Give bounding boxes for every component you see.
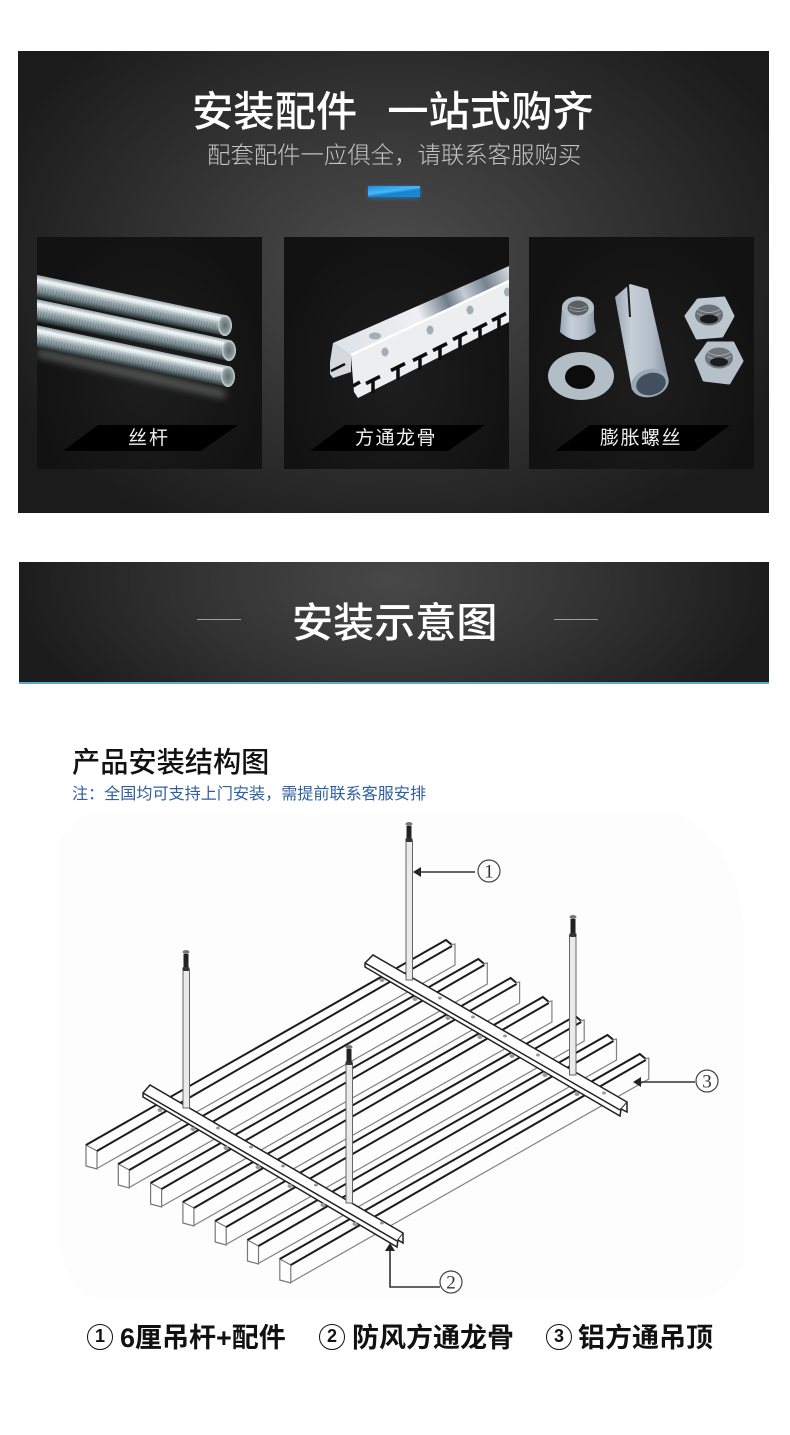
card: expansion bolt [529, 237, 754, 469]
image: slotted channel [310, 266, 509, 451]
caption: expansion bolt: 膨胀螺丝 [600, 428, 682, 449]
heading: diagram banner title: 安装示意图 [292, 600, 497, 646]
callout: marker 3 [633, 1070, 718, 1092]
chart: ceiling structure diagram [85, 822, 719, 1294]
crossbar: front keel [143, 1085, 403, 1247]
image: threaded rods [37, 274, 238, 451]
callout: marker 2: 2 [446, 1272, 456, 1294]
caption: threaded rod: 丝杆 [128, 428, 170, 449]
legend: part names [87, 1323, 713, 1353]
heading: accessories title: 安装配件 一站式购齐 [192, 89, 594, 135]
panel: installation accessories [18, 51, 769, 513]
legend item 2: 2 [327, 1326, 337, 1346]
hanger rods [182, 822, 576, 1203]
text: installation note: 注：全国均可支持上门安装，需提前联系客服安排 [72, 785, 426, 803]
callout: marker 2 [385, 1243, 462, 1294]
legend item 3: 铝方通吊顶 [578, 1323, 713, 1353]
divider: left dash [197, 619, 241, 620]
hex nut lower [696, 343, 742, 383]
washer [548, 352, 614, 400]
slats: aluminium square tubes [86, 940, 649, 1283]
text: accessories subtitle: 配套配件一应俱全，请联系客服购买 [207, 142, 581, 168]
legend item 3: 3 [554, 1326, 564, 1346]
accent line: banner bottom [19, 682, 769, 684]
legend item 1: 6厘吊杆+配件 [120, 1323, 286, 1353]
card: threaded rod [37, 237, 262, 469]
icon: blue accent bar [368, 186, 420, 197]
callout: marker 1: 1 [484, 862, 494, 882]
heading: structure diagram title: 产品安装结构图 [72, 746, 269, 778]
crossbar: rear keel [365, 955, 627, 1116]
sleeve nut [560, 307, 596, 340]
card: square tube keel [284, 237, 509, 469]
divider: right dash [554, 619, 598, 620]
panel: installation diagram banner [19, 562, 769, 684]
image: expansion bolt parts [548, 284, 744, 451]
hex nut upper [686, 298, 733, 338]
legend item 1: 1 [95, 1326, 105, 1346]
callout: marker 1 [413, 860, 500, 882]
anchor tube [615, 284, 668, 390]
caption: square tube keel: 方通龙骨 [355, 428, 437, 449]
callout: marker 3: 3 [702, 1072, 712, 1092]
legend item 2: 防风方通龙骨 [352, 1323, 514, 1353]
